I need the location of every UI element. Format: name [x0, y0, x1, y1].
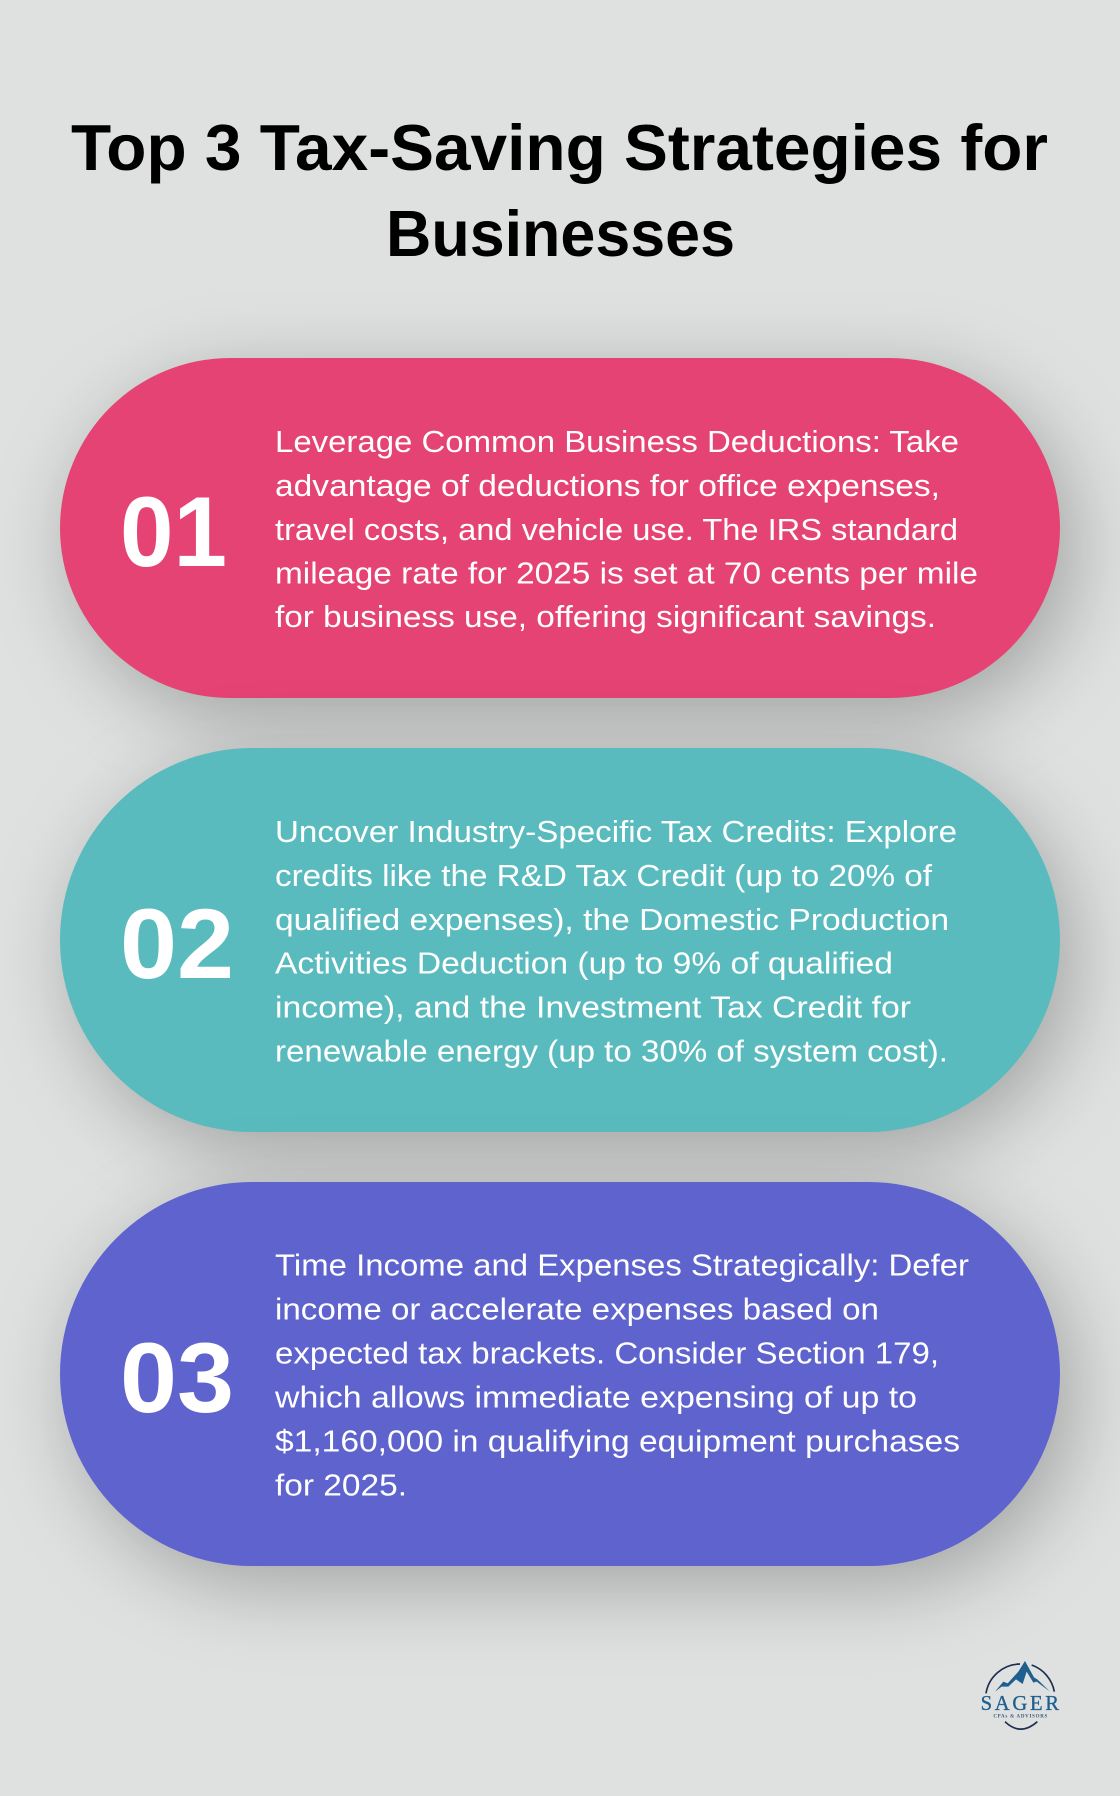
text block: common business deductions: Leverage Common Business Deductions: Take [275, 424, 959, 459]
text block: industry-specific tax credits [275, 814, 957, 1069]
title: Top 3 Tax-Saving Strategies for [71, 111, 1048, 184]
logo wordmark: SAGER [981, 1693, 1059, 1715]
text block: industry-specific tax credits: qualified expenses), the Domestic Production [275, 902, 949, 937]
logo mountain [995, 1661, 1050, 1692]
text block: timing income and expenses [274, 1248, 969, 1503]
number 03: 03 [120, 1322, 234, 1433]
text block: common business deductions: advantage of deductions for office expenses, [275, 468, 940, 503]
text block: timing income and expenses: income or accelerate expenses based on [275, 1292, 879, 1327]
text block: industry-specific tax credits: Activities Deduction (up to 9% of qualified [275, 946, 893, 981]
text block: timing income and expenses: expected tax brackets. Consider Section 179, [275, 1336, 939, 1371]
text block: industry-specific tax credits: credits like the R&D Tax Credit (up to 20% of [275, 858, 932, 893]
number 01: 01 [120, 476, 227, 587]
card background: teal [60, 748, 1060, 1132]
text block: common business deductions: travel costs, and vehicle use. The IRS standard [275, 512, 958, 547]
logo: Sager CPAs & Advisors [981, 1661, 1059, 1729]
card background: indigo [60, 1182, 1060, 1566]
text block: common business deductions: for business use, offering significant savings. [275, 599, 936, 634]
panel: strategy 01 [60, 358, 1060, 698]
title [71, 111, 1048, 270]
text block: timing income and expenses: $1,160,000 in qualifying equipment purchases [275, 1424, 960, 1459]
text block: industry-specific tax credits: income), and the Investment Tax Credit for [275, 990, 911, 1025]
panel: strategy 03 [60, 1182, 1060, 1566]
text block: industry-specific tax credits: Uncover Industry-Specific Tax Credits: Explore [275, 814, 957, 849]
text block: industry-specific tax credits: renewable energy (up to 30% of system cost). [275, 1034, 948, 1069]
title: Businesses [386, 197, 735, 270]
text block: common business deductions [275, 424, 978, 634]
panel: strategy 02 [60, 748, 1060, 1132]
text block: timing income and expenses: Time Income and Expenses Strategically: Defer [275, 1248, 969, 1283]
text block: timing income and expenses: which allows immediate expensing of up to [274, 1380, 917, 1415]
card background: pink [60, 358, 1060, 698]
logo ring arcs [986, 1664, 1054, 1729]
text block: common business deductions: mileage rate for 2025 is set at 70 cents per mile [275, 556, 978, 590]
number 02: 02 [120, 888, 234, 999]
logo tagline: CPAs & ADVISORS [993, 1715, 1048, 1720]
text block: timing income and expenses: for 2025. [275, 1468, 407, 1503]
